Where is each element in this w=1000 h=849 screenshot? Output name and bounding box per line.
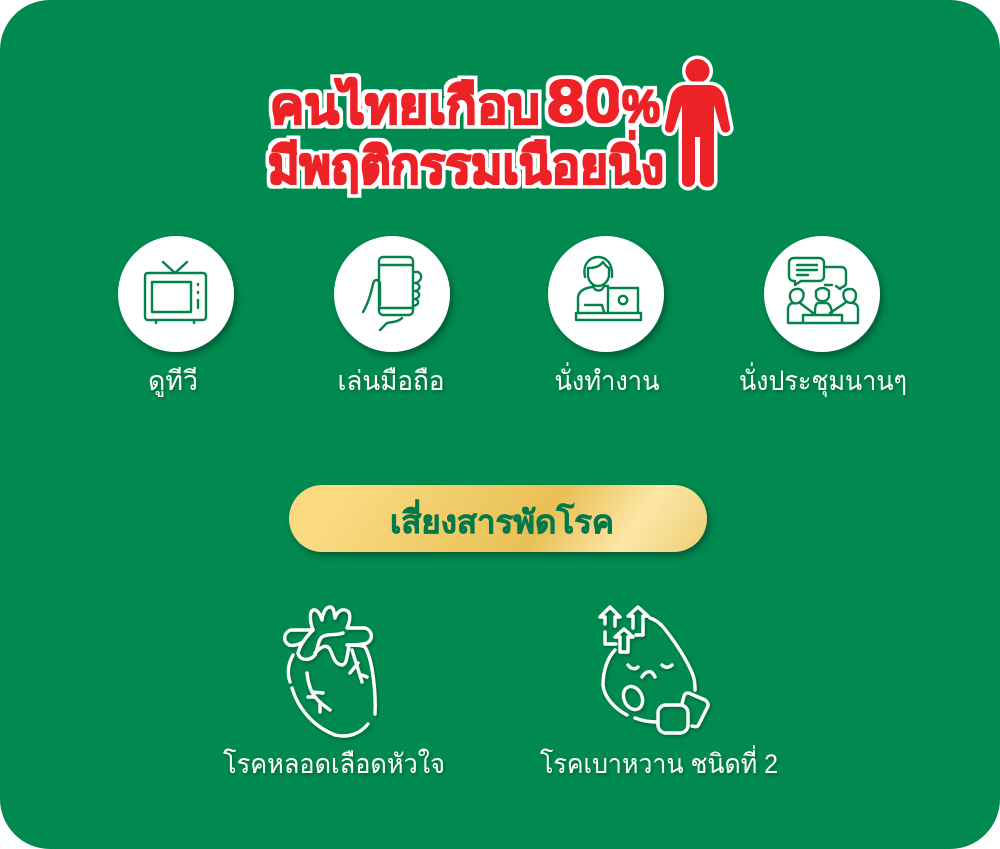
icon: red person	[665, 59, 730, 187]
banner pill	[289, 485, 707, 552]
activity: using phone	[334, 236, 450, 396]
banner heading: เสี่ยงสารพัดโรค	[390, 499, 614, 540]
label: นั่งทำงาน	[554, 362, 660, 396]
icon: people meeting with speech bubbles	[788, 258, 858, 323]
activity: watching TV	[118, 236, 234, 397]
icon: person at laptop	[576, 257, 641, 320]
activity: long meetings	[739, 236, 907, 398]
title line 1: คนไทยเกือบ	[270, 77, 540, 134]
icon circle	[764, 236, 880, 352]
icon: television	[145, 262, 206, 323]
icon: heart	[285, 607, 375, 736]
title percent sign: %	[622, 80, 660, 132]
disease: cardiovascular	[223, 607, 445, 779]
icon circle	[548, 236, 664, 352]
icon: sugar drop with cubes and arrows	[600, 607, 708, 733]
title line 2: มีพฤติกรรมเนือยนิ่ง	[268, 131, 664, 194]
gold risk banner	[289, 485, 707, 552]
label: โรคหลอดเลือดหัวใจ	[223, 748, 445, 779]
label: ดูทีวี	[148, 366, 198, 397]
title figure 80: 80	[547, 68, 622, 135]
title	[268, 68, 664, 194]
icon: hand holding phone	[363, 257, 421, 330]
icon circle	[334, 236, 450, 352]
label: โรคเบาหวาน ชนิดที่ 2	[540, 745, 778, 779]
icon circle	[118, 236, 234, 352]
label: เล่นมือถือ	[338, 366, 444, 396]
disease: type 2 diabetes	[540, 607, 778, 779]
label: นั่งประชุมนานๆ	[739, 362, 907, 398]
activity: working while seated	[548, 236, 664, 396]
